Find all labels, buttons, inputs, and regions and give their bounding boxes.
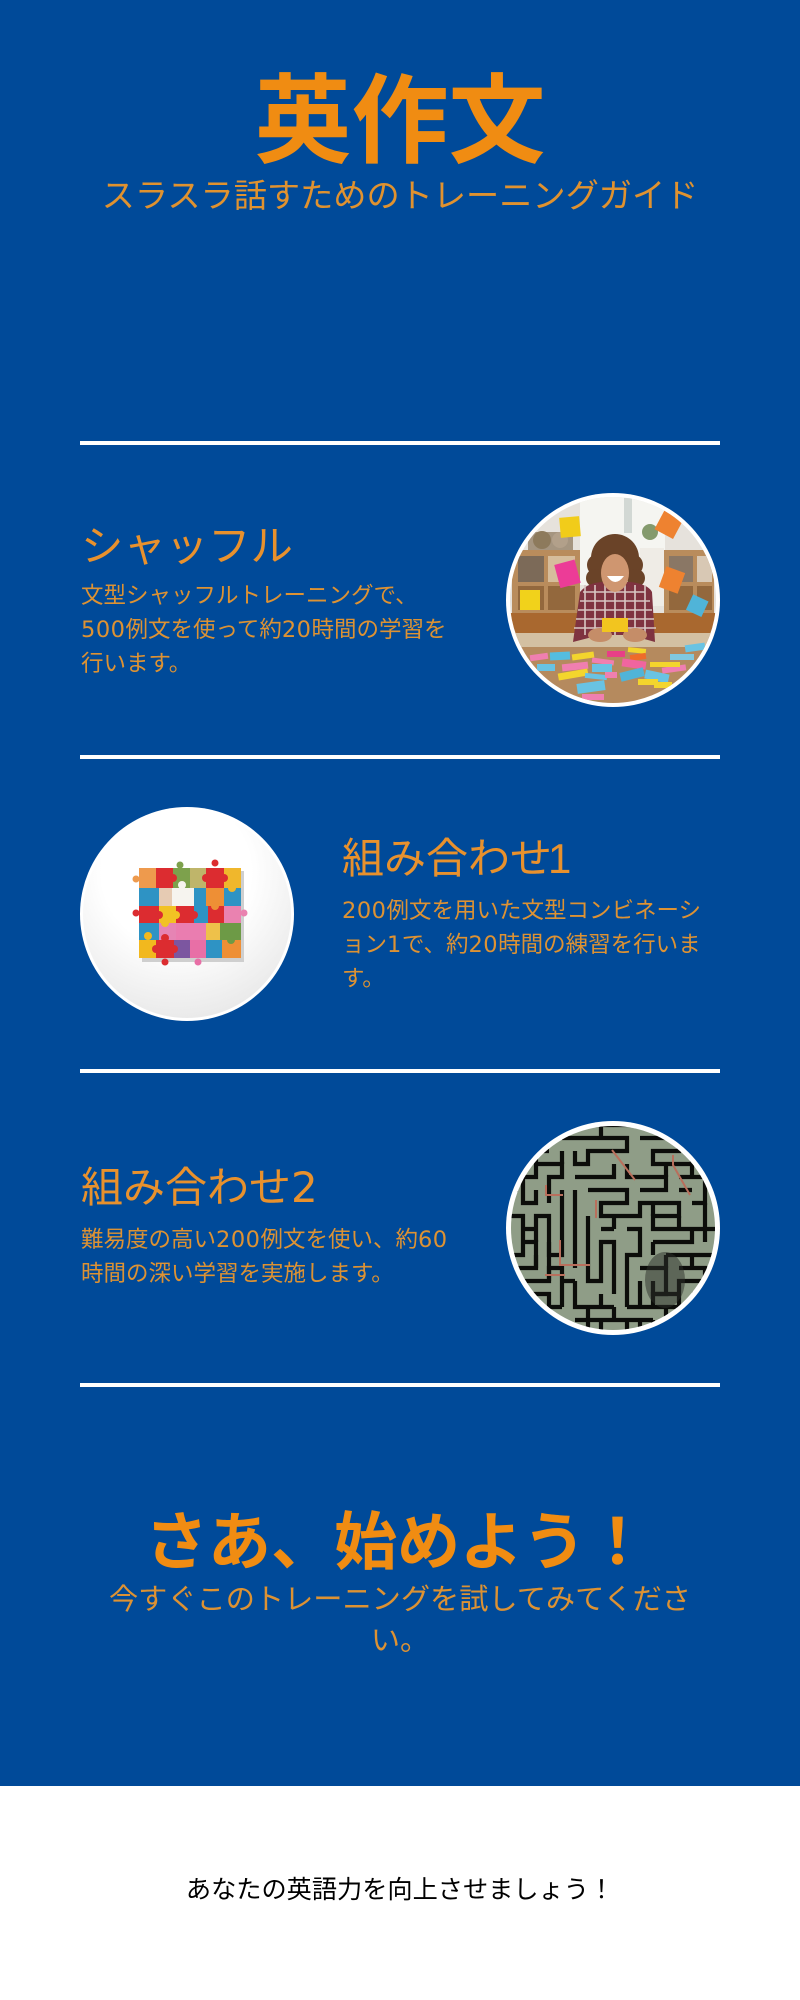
image: jigsaw puzzle bbox=[80, 807, 294, 1021]
title: 英作文 bbox=[254, 67, 546, 176]
section: combination 1 bbox=[342, 835, 701, 991]
image: maze bbox=[506, 1121, 720, 1335]
heading: shuffle: シャッフル bbox=[81, 523, 293, 570]
description: shuffle bbox=[81, 583, 446, 676]
section: shuffle bbox=[81, 523, 446, 676]
footer text: あなたの英語力を向上させましょう！ bbox=[186, 1876, 614, 1904]
description: combination 1: す。 bbox=[342, 966, 385, 991]
subtitle: スラスラ話すためのトレーニングガイド bbox=[102, 178, 698, 215]
description: shuffle: 文型シャッフルトレーニングで、 bbox=[81, 583, 418, 608]
heading: combination 1: 組み合わせ1 bbox=[342, 835, 571, 882]
description: combination 2: 時間の深い学習を実施します。 bbox=[81, 1261, 394, 1286]
heading: combination 2: 組み合わせ2 bbox=[81, 1163, 318, 1212]
woman bbox=[573, 534, 656, 642]
description: combination 1 bbox=[342, 898, 701, 991]
CTA text: い。 bbox=[371, 1625, 429, 1657]
flying sticky notes bbox=[520, 511, 709, 617]
section: combination 2 bbox=[81, 1163, 448, 1286]
description: shuffle: 500例文を使って約20時間の学習を bbox=[81, 617, 446, 643]
description: shuffle: 行います。 bbox=[81, 651, 191, 676]
description: combination 2 bbox=[81, 1227, 448, 1286]
CTA text: 今すぐこのトレーニングを試してみてくださ bbox=[109, 1584, 691, 1616]
description: combination 1: 200例文を用いた文型コンビネーシ bbox=[342, 898, 701, 924]
CTA text bbox=[109, 1584, 691, 1657]
notes on table bbox=[530, 643, 705, 700]
description: combination 1: ョン1で、約20時間の練習を行いま bbox=[342, 932, 701, 958]
CTA heading: さあ、始めよう！ bbox=[145, 1508, 649, 1578]
image: woman with sticky notes bbox=[506, 493, 720, 707]
description: combination 2: 難易度の高い200例文を使い、約60 bbox=[81, 1227, 448, 1253]
call to action bbox=[109, 1508, 691, 1657]
